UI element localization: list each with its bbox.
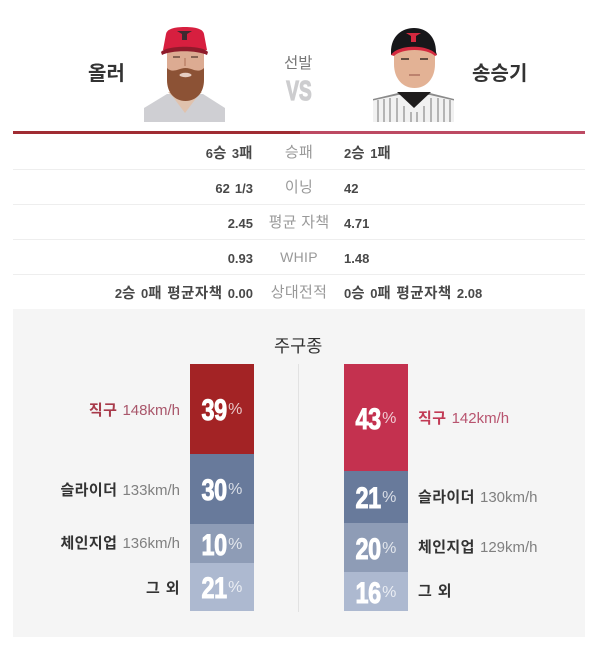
segment: changeup 10% (190, 524, 254, 563)
segment: slider 21%: % (382, 489, 396, 506)
row: ERA (13, 205, 585, 240)
starter label: 선발 (284, 55, 313, 72)
segment: fastball 39%: % (228, 401, 242, 418)
row: ERA: 평균 자책 (269, 214, 329, 231)
segment: slider 30%: % (228, 481, 242, 498)
segment: other 21%: % (228, 579, 242, 596)
row: innings: 이닝 (285, 179, 313, 196)
segment: changeup 10%: % (228, 536, 242, 552)
row: innings: 62 1/3 (215, 181, 253, 196)
label: right slider: 슬라이더 130km/h (418, 489, 538, 506)
segment: other 16%: % (382, 584, 396, 600)
segment: other 21%: 21 (201, 572, 227, 605)
label: right changeup: 체인지업 129km/h (418, 539, 538, 556)
row: WHIP: 0.93 (228, 251, 253, 266)
segment: slider 21% (344, 471, 408, 523)
segment: other 16%: 16 (355, 576, 381, 610)
segment: slider 30%: 30 (201, 474, 227, 507)
row: head to head: 2승 0패 평균자책 0.00 (115, 286, 253, 302)
label: right other: 그 외 (418, 583, 452, 600)
row: head to head (13, 275, 585, 310)
panel: main pitch types (13, 309, 585, 637)
segment: changeup 20% (344, 523, 408, 572)
portrait: right pitcher in black cap (373, 28, 454, 122)
row: ERA: 2.45 (228, 216, 253, 231)
row: WHIP (13, 240, 585, 275)
segment: other 16% (344, 572, 408, 611)
row: ERA: 4.71 (344, 216, 369, 231)
comparison table (13, 144, 585, 302)
row: win-loss: 승패 (285, 144, 313, 161)
segment: changeup 20%: 20 (355, 532, 381, 566)
segment: slider 30% (190, 454, 254, 524)
VS mark: VS (286, 75, 312, 106)
stacked bar: right pitcher (344, 364, 408, 611)
row: innings (13, 170, 585, 205)
player name: right pitcher: 송승기 (472, 63, 528, 85)
row: head to head: 0승 0패 평균자책 2.08 (344, 286, 482, 302)
segment: fastball 39% (190, 364, 254, 454)
segment: fastball 39%: 39 (201, 394, 227, 427)
portrait: left pitcher in red cap (144, 27, 225, 122)
row: win-loss: 2승 1패 (344, 146, 391, 162)
center divider (298, 364, 299, 612)
label: right fastball: 직구 142km/h (418, 410, 509, 427)
row: WHIP: 1.48 (344, 251, 369, 266)
row: win-loss: 6승 3패 (206, 146, 253, 162)
label: left fastball: 직구 148km/h (89, 402, 180, 419)
label: left slider: 슬라이더 133km/h (60, 482, 180, 499)
segment: changeup 20%: % (382, 540, 396, 556)
player name: left pitcher: 올러 (88, 63, 125, 85)
segment: changeup 10%: 10 (201, 528, 227, 562)
row: head to head: 상대전적 (271, 284, 327, 301)
stacked bar: left pitcher (190, 364, 254, 611)
label: left other: 그 외 (146, 580, 180, 597)
segment: other 21% (190, 563, 254, 611)
segment: fastball 43% (344, 364, 408, 471)
row: win-loss (13, 135, 585, 170)
team colour divider (13, 131, 585, 134)
panel heading: 주구종 (274, 336, 322, 356)
row: WHIP: WHIP (280, 249, 318, 265)
segment: fastball 43%: 43 (355, 402, 381, 436)
label: left changeup: 체인지업 136km/h (60, 535, 180, 552)
segment: fastball 43%: % (382, 410, 396, 426)
segment: slider 21%: 21 (355, 482, 381, 515)
row: innings: 42 (344, 181, 358, 196)
